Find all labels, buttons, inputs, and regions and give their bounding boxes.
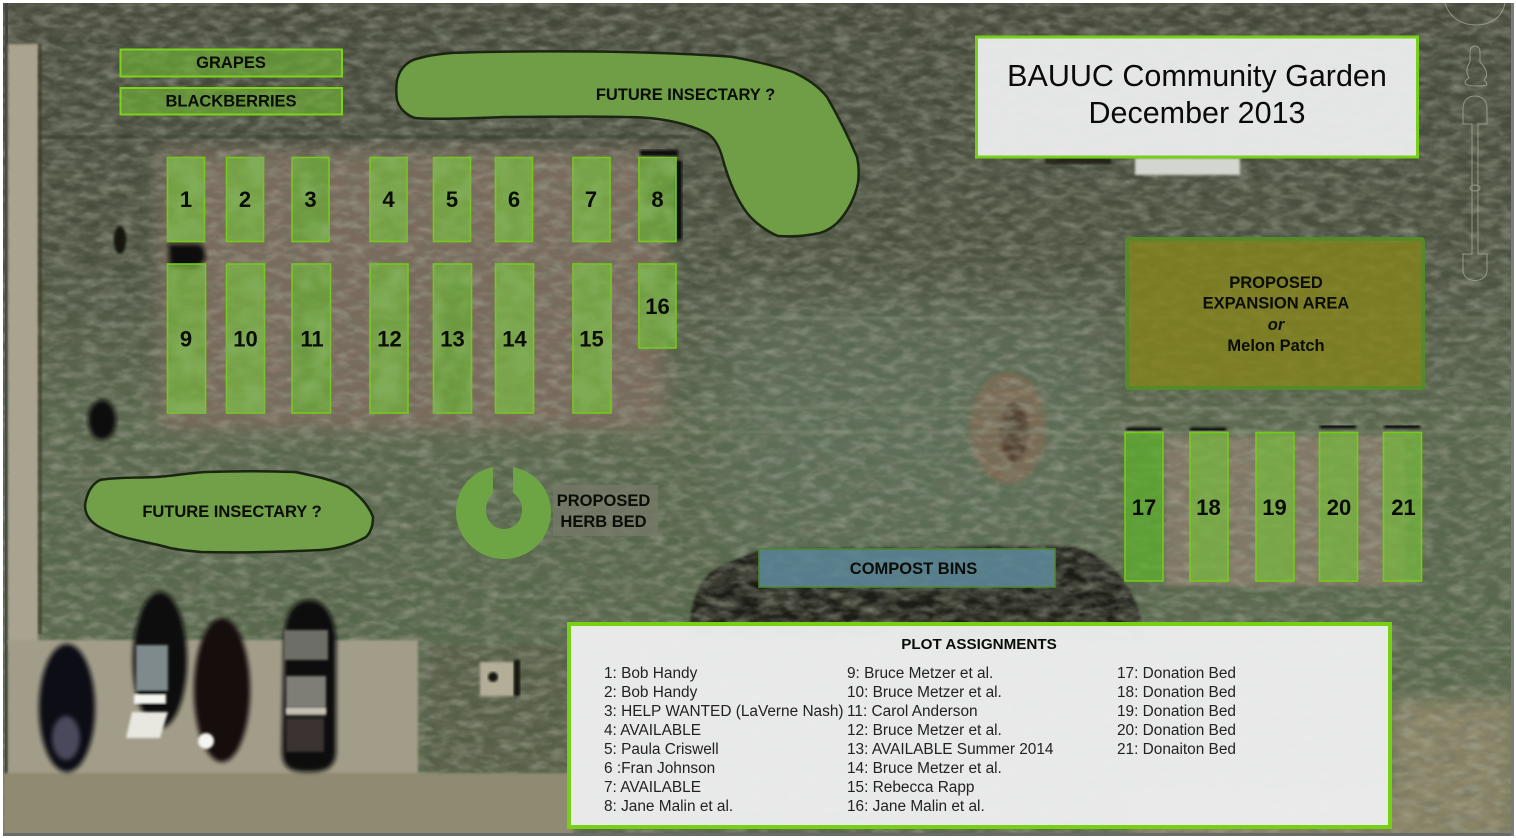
proposed expansion area: PROPOSED [1229,274,1323,292]
plot numbers: 17 [1132,495,1156,520]
proposed expansion area: or [1268,316,1286,334]
assignments column 1 [604,665,844,815]
assignments column 3: 17: Donation Bed [1117,665,1236,682]
assignments column 1: 2: Bob Handy [604,684,698,701]
plot numbers: 2 [239,187,251,212]
assignments column 1: 4: AVAILABLE [604,722,701,739]
plot numbers: 8 [651,187,664,212]
future insectary top [396,51,859,236]
plot numbers: 19 [1262,495,1287,520]
plot numbers: 4 [382,187,395,212]
title box: December 2013 [1088,96,1306,130]
grapes bed [120,50,342,76]
assignments column 1: 1: Bob Handy [604,665,698,682]
title box [976,37,1418,157]
grapes bed: GRAPES [196,54,266,72]
plot numbers: 14 [502,326,527,352]
assignments column 2: 16: Jane Malin et al. [847,798,985,815]
assignments column 2: 10: Bruce Metzer et al. [847,684,1002,701]
future insectary bottom [85,471,373,552]
vegetation mottling over beds [160,150,685,420]
assignments column 2: 11: Carol Anderson [847,703,978,720]
proposed herb bed ring [456,467,551,559]
plots 17 to 21 [1125,432,1422,581]
assignments column 1: 5: Paula Criswell [604,741,719,758]
plot numbers: 16 [645,294,670,319]
shovel outline decoration [1445,3,1505,280]
plot numbers: 12 [377,326,402,352]
future insectary top: FUTURE INSECTARY ? [596,86,775,104]
title box: BAUUC Community Garden [1007,59,1387,93]
plot assignments panel [569,624,1390,827]
plot numbers: 15 [579,326,604,352]
panel heading: PLOT ASSIGNMENTS [901,636,1057,653]
plot numbers: 1 [180,187,192,212]
plot numbers: 6 [508,187,520,212]
assignments column 1: 7: AVAILABLE [604,779,701,796]
compost bins [759,549,1055,587]
plot numbers: 5 [446,187,458,212]
plot numbers: 9 [180,326,192,352]
proposed expansion area: EXPANSION AREA [1203,294,1349,312]
assignments column 1: 3: HELP WANTED (LaVerne Nash) [604,703,844,720]
assignments column 3: 20: Donation Bed [1117,722,1236,739]
assignments column 3: 18: Donation Bed [1117,684,1236,701]
assignments column 3 [1117,665,1236,758]
blackberries bed: BLACKBERRIES [165,92,297,110]
assignments column 2: 15: Rebecca Rapp [847,779,974,796]
plot numbers [180,187,1416,520]
compost bins: COMPOST BINS [850,560,977,578]
plot numbers: 21 [1391,495,1416,520]
assignments column 3: 19: Donation Bed [1117,703,1236,720]
assignments column 2: 9: Bruce Metzer et al. [847,665,993,682]
plot numbers: 7 [585,187,597,212]
assignments column 3: 21: Donaiton Bed [1117,741,1236,758]
assignments column 2: 14: Bruce Metzer et al. [847,760,1002,777]
proposed herb bed label: HERB BED [560,513,647,531]
proposed expansion area [1127,239,1423,388]
assignments column 2: 12: Bruce Metzer et al. [847,722,1002,739]
proposed herb bed label: PROPOSED [557,492,650,510]
assignments column 2 [847,665,1054,815]
plot numbers: 11 [300,326,324,352]
plot numbers: 18 [1196,495,1221,520]
future insectary bottom: FUTURE INSECTARY ? [142,503,322,521]
plots 9 to 16 [168,264,676,413]
plot numbers: 3 [304,187,317,212]
plot numbers: 13 [440,326,465,352]
proposed expansion area: Melon Patch [1227,337,1325,355]
blackberries bed [120,88,342,114]
assignments column 1: 6 :Fran Johnson [604,760,715,777]
assignments column 1: 8: Jane Malin et al. [604,798,733,815]
plot numbers: 10 [233,326,258,352]
assignments column 2: 13: AVAILABLE Summer 2014 [847,741,1054,758]
plot numbers: 20 [1327,495,1351,520]
plots 1 to 8 [168,158,676,242]
proposed herb bed label [553,485,658,536]
